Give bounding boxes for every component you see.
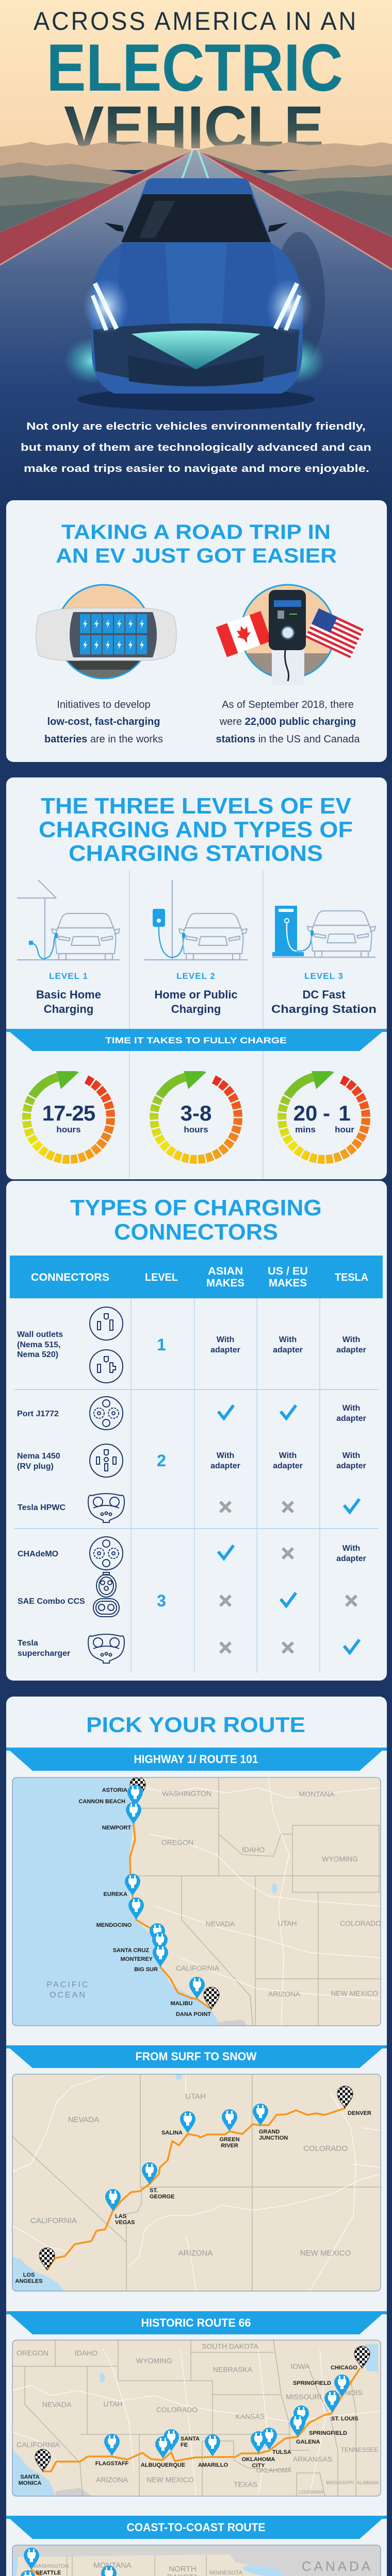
table rows: Nema 1450: [17, 1452, 60, 1461]
table rows: Tesla: [18, 1639, 38, 1648]
city labels: FE: [181, 2442, 188, 2448]
panel: types of charging connectors: With: [342, 1404, 360, 1413]
table rows: supercharger: [18, 1649, 70, 1658]
header: title and car illustration: [0, 0, 392, 474]
state labels: OCEAN: [50, 1991, 87, 1999]
state labels: [30, 2092, 351, 2258]
level labels: Charging: [44, 1003, 93, 1015]
panel: types of charging connectors: [6, 1181, 387, 1681]
state labels: NORTH: [169, 2565, 197, 2573]
city labels: JUNCTION: [259, 2135, 288, 2141]
state labels: OREGON: [161, 1838, 193, 1846]
city labels: OKLAHOMA: [242, 2456, 275, 2463]
city labels: RIVER: [221, 2143, 238, 2149]
state labels: NEVADA: [42, 2400, 72, 2409]
state labels: WYOMING: [322, 1855, 358, 1863]
text: batteries: [44, 699, 163, 745]
heading: taking a road trip: [56, 521, 337, 567]
state labels: NEW MEXICO: [331, 1989, 378, 1997]
text: batteries: Initiatives to develop: [57, 699, 151, 710]
table rows: Port J1772: [17, 1410, 59, 1418]
title: vehicle: VEHICLE: [64, 94, 324, 162]
state labels: ARIZONA: [96, 2476, 128, 2484]
pins: [39, 2086, 353, 2270]
level labels: Basic Home: [36, 988, 101, 1001]
banner: historic route 66: HISTORIC ROUTE 66: [141, 2316, 251, 2329]
state labels: NEVADA: [206, 1920, 235, 1928]
panel: types of charging connectors: With: [279, 1335, 297, 1344]
table rows: Nema 520): [17, 1350, 58, 1359]
table rows: (Nema 515,: [17, 1341, 61, 1349]
state labels: UTAH: [103, 2400, 123, 2408]
city labels: SPRINGFIELD: [309, 2430, 347, 2436]
city labels: SANTA CRUZ: [113, 1947, 149, 1954]
level labels: LEVEL 2: [176, 971, 216, 981]
panel: types of charging connectors: adapter: [336, 1462, 366, 1470]
panel: types of charging connectors: 1: [157, 1335, 166, 1354]
panel: types of charging connectors: adapter: [273, 1346, 303, 1354]
state labels: [34, 2562, 370, 2576]
state labels: IOWA: [291, 2362, 310, 2370]
city labels: MONICA: [19, 2480, 41, 2486]
intro text: Not only are electric vehicles environmentally friendly,: [26, 421, 366, 432]
state labels: WASHINGTON: [162, 1789, 211, 1798]
gauge: level 3 time: 20: [293, 1101, 317, 1125]
table header: [10, 1256, 383, 1298]
x marks: [220, 1502, 356, 1653]
state labels: ARIZONA: [178, 2249, 213, 2258]
city labels: CITY: [252, 2463, 265, 2469]
heading: pick your route: PICK YOUR ROUTE: [86, 1713, 305, 1737]
gauge: level 3 time: mins: [295, 1125, 316, 1134]
panel: types of charging connectors: adapter: [210, 1462, 240, 1470]
table rows: CHAdeMO: [18, 1550, 58, 1558]
text: 22,000 stations: As of September 2018, there: [222, 699, 354, 710]
city labels: BIG SUR: [134, 1967, 158, 1973]
panel: three levels of charging: [6, 777, 387, 1179]
panel: road trip easier: [6, 500, 387, 762]
gauge: level 1 time: hours: [56, 1125, 81, 1134]
state labels: MONTANA: [93, 2561, 132, 2570]
state labels: NEW MEXICO: [300, 2249, 351, 2258]
city labels: MALIBU: [171, 2001, 192, 2007]
intro text: but many of them are technologically advanced and can: [21, 442, 371, 453]
city labels: ST. LOUIS: [331, 2416, 358, 2422]
city labels: MENDOCINO: [96, 1922, 132, 1928]
table header: MAKES: [269, 1277, 307, 1289]
panel: types of charging connectors: 2: [157, 1451, 166, 1470]
table header: ASIAN: [208, 1265, 243, 1277]
icon: level 2 wallbox: [144, 880, 248, 960]
panel: types of charging connectors: With: [217, 1451, 234, 1460]
state labels: OREGON: [17, 2349, 48, 2357]
city labels: SANTA: [20, 2474, 40, 2480]
level labels: Charging Station: [271, 1003, 377, 1015]
state labels: MISSOURI: [286, 2393, 322, 2401]
state labels: ARIZONA: [268, 1990, 301, 1998]
state labels: UTAH: [277, 1919, 297, 1927]
table rows: Wall outlets: [17, 1330, 63, 1339]
panel: types of charging connectors: adapter: [336, 1346, 366, 1354]
city labels: [79, 1787, 211, 2018]
state labels: IDAHO: [75, 2349, 97, 2357]
state labels: CALIFORNIA: [176, 1964, 220, 1972]
panel: types of charging connectors: adapter: [336, 1554, 366, 1563]
gauge: level 1 time: 17-25: [42, 1101, 95, 1125]
banner: highway 1: [6, 1748, 387, 1771]
text: batteries: batteries are in the works: [44, 734, 163, 745]
heading: three levels: CHARGING STATIONS: [69, 841, 323, 866]
city labels: AMARILLO: [198, 2462, 228, 2468]
table header: TESLA: [335, 1272, 368, 1283]
panel: types of charging connectors: With: [279, 1451, 297, 1460]
state labels: TEXAS: [234, 2480, 257, 2488]
state labels: TENNESSEE: [341, 2446, 378, 2453]
state labels: MONTANA: [299, 1790, 335, 1798]
city labels: ANGELES: [15, 2278, 43, 2284]
panel: types of charging connectors: adapter: [336, 1414, 366, 1423]
gauge: level 2 time: [150, 1071, 242, 1164]
heading: connectors: [70, 1195, 322, 1245]
level labels: Charging: [171, 1003, 221, 1015]
banner: historic route 66: [6, 2311, 387, 2334]
gauge: level 2 time: 3-8: [181, 1101, 211, 1125]
gauge: level 2 time: hours: [184, 1125, 208, 1134]
heading: connectors: CONNECTORS: [114, 1219, 278, 1245]
table header: US / EU: [268, 1265, 308, 1277]
city labels: GREEN: [219, 2137, 240, 2143]
level labels: Home or Public: [154, 988, 238, 1001]
level labels: [36, 971, 377, 1015]
state labels: SOUTH DAKOTA: [202, 2342, 258, 2350]
state labels: MINNESOTA: [209, 2570, 243, 2576]
title: across america: ACROSS AMERICA IN AN: [34, 7, 358, 36]
banner: time to charge: TIME IT TAKES TO FULLY CHARGE: [105, 1036, 287, 1045]
city labels: CHICAGO: [331, 2365, 357, 2371]
state labels: COLORADO: [156, 2405, 198, 2414]
state labels: CALIFORNIA: [17, 2441, 60, 2449]
table header: LEVEL: [145, 1272, 178, 1283]
banner: coast to coast: COAST-TO-COAST ROUTE: [127, 2521, 265, 2534]
city labels: ALBUQUERQUE: [141, 2462, 185, 2468]
banner: surf to snow: [6, 2045, 387, 2068]
gauge: level 1 time: [22, 1071, 115, 1164]
city labels: LOS: [23, 2272, 35, 2278]
gauge: level 3 time: -: [323, 1101, 330, 1125]
banner: surf to snow: FROM SURF TO SNOW: [135, 2050, 257, 2063]
icon: charger with flags: [216, 582, 364, 689]
state labels: OKLAHOMA: [256, 2467, 291, 2474]
city labels: ST.: [150, 2188, 158, 2194]
city labels: SPRINGFIELD: [293, 2380, 331, 2386]
road: [0, 150, 392, 495]
state labels: ALABAMA: [357, 2480, 379, 2485]
heading: taking a road trip: TAKING A ROAD TRIP IN: [61, 521, 331, 544]
banner: coast to coast: [6, 2516, 387, 2539]
state labels: NEW MEXICO: [146, 2476, 194, 2484]
city labels: SANTA: [181, 2436, 200, 2442]
city labels: GALENA: [296, 2439, 320, 2445]
city labels: DANA POINT: [176, 2011, 211, 2018]
city labels: GRAND: [259, 2129, 280, 2135]
city labels: CANNON BEACH: [79, 1799, 125, 1805]
banner: highway 1: HIGHWAY 1/ ROUTE 101: [134, 1753, 258, 1766]
table rows: [17, 1330, 85, 1658]
map: route 66: [12, 2340, 381, 2496]
state labels: COLORADO: [303, 2144, 348, 2153]
state labels: UTAH: [185, 2092, 206, 2101]
heading: connectors: TYPES OF CHARGING: [70, 1195, 322, 1221]
city labels: SEATTLE: [36, 2570, 61, 2576]
state labels: NEVADA: [68, 2115, 99, 2124]
heading: three levels: THE THREE LEVELS OF EV: [41, 793, 352, 819]
city labels: [15, 2110, 371, 2284]
state labels: MISSISSIPPI: [326, 2480, 354, 2485]
intro text: [21, 421, 371, 474]
city labels: SALINA: [161, 2130, 183, 2136]
banner: time to charge: [6, 1029, 387, 1051]
icon: level 1 home charging: [17, 880, 120, 960]
icon: car with batteries: [36, 584, 176, 679]
panel: types of charging connectors: adapter: [273, 1462, 303, 1470]
state labels: WYOMING: [136, 2357, 172, 2365]
intro text: make road trips easier to navigate and more enjoyable.: [24, 463, 369, 474]
icon: level 3 DC station: [272, 906, 375, 957]
city labels: VEGAS: [115, 2219, 135, 2226]
gauge: level 3 time: hour: [335, 1125, 354, 1134]
city labels: [19, 2365, 358, 2486]
text: 22,000 stations: [216, 699, 360, 745]
city labels: FLAGSTAFF: [95, 2461, 129, 2467]
panel: types of charging connectors: adapter: [210, 1346, 240, 1354]
title: electric: ELECTRIC: [46, 30, 343, 105]
city labels: ASTORIA: [102, 1787, 127, 1793]
heading: taking a road trip: AN EV JUST GOT EASIER: [56, 545, 337, 567]
panel: types of charging connectors: With: [342, 1544, 360, 1553]
level labels: LEVEL 3: [304, 971, 344, 981]
state labels: [17, 2342, 379, 2495]
city labels: GEORGE: [150, 2194, 174, 2200]
panel: types of charging connectors: With: [217, 1335, 234, 1344]
gauge: level 3 time: 1: [338, 1101, 351, 1125]
state labels: [47, 1789, 381, 1999]
city labels: NEWPORT: [102, 1825, 131, 1831]
state labels: LOUISIANA: [299, 2489, 323, 2495]
state labels: WASHINGTON: [34, 2564, 69, 2569]
pins: [35, 2346, 370, 2471]
city labels: MONTEREY: [121, 1956, 153, 1962]
pins: [125, 1777, 219, 2009]
state labels: NEBRASKA: [213, 2365, 253, 2374]
level labels: LEVEL 1: [49, 971, 88, 981]
connector icons: [88, 1307, 124, 1663]
state labels: CANADA: [302, 2558, 373, 2574]
city labels: EUREKA: [104, 1891, 127, 1897]
city labels: LAS: [115, 2213, 126, 2219]
text: 22,000 stations: stations in the US and Canada: [216, 734, 360, 745]
state labels: ILLINOIS: [333, 2388, 363, 2397]
panel: types of charging connectors: With: [342, 1451, 360, 1460]
city labels: TULSA: [272, 2449, 291, 2455]
state labels: CALIFORNIA: [30, 2216, 77, 2225]
map: coast to coast: [12, 2545, 381, 2576]
state labels: COLORADO: [340, 1919, 381, 1927]
table rows: SAE Combo CCS: [18, 1597, 85, 1606]
city labels: DENVER: [348, 2110, 371, 2116]
panel: types of charging connectors: 3: [157, 1591, 166, 1610]
state labels: KANSAS: [236, 2412, 265, 2420]
map: highway 1 route 101: [12, 1777, 381, 2026]
check marks: [219, 1406, 358, 1653]
table rows: (RV plug): [17, 1462, 54, 1471]
pins: [21, 2548, 117, 2576]
map: surf to snow: [12, 2074, 381, 2291]
gauge: level 3 time: [277, 1071, 370, 1164]
panel: types of charging connectors: With: [342, 1335, 360, 1344]
table rows: Tesla HPWC: [18, 1503, 66, 1512]
state labels: ARKANSAS: [293, 2455, 332, 2463]
car: [64, 178, 325, 411]
table header: CONNECTORS: [31, 1272, 109, 1283]
table header: MAKES: [206, 1277, 244, 1289]
panel: pick your route: [6, 1697, 387, 2576]
text: batteries: low-cost, fast-charging: [47, 716, 160, 727]
state labels: PACIFIC: [47, 1980, 89, 1989]
text: 22,000 stations: were 22,000 public charging: [219, 716, 356, 727]
state labels: IDAHO: [242, 1845, 265, 1854]
heading: three levels: CHARGING AND TYPES OF: [39, 817, 353, 842]
level labels: DC Fast: [302, 988, 346, 1001]
heading: three levels: [39, 793, 353, 866]
